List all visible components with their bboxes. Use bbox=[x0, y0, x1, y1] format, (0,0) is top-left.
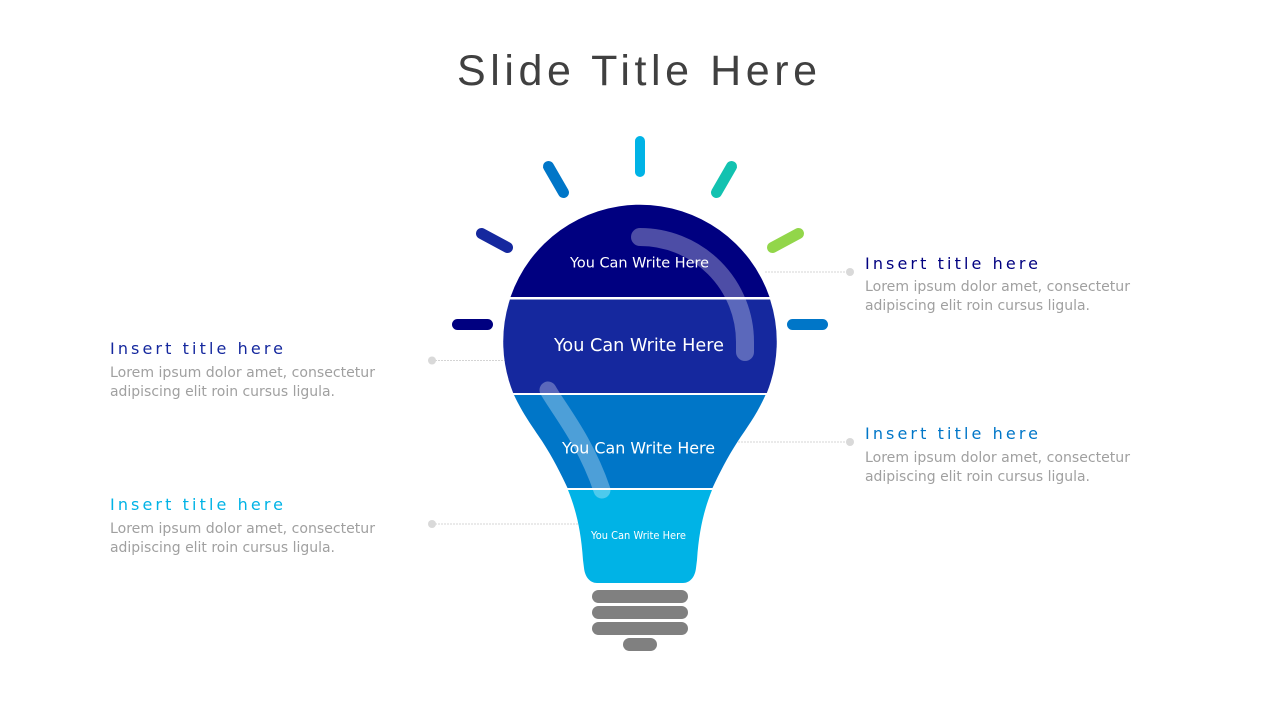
bulb segment 4 bbox=[568, 490, 712, 583]
segment label 1: You Can Write Here bbox=[569, 256, 709, 272]
bulb segment 1 bbox=[510, 205, 770, 297]
text block: lower right: adipiscing elit roin cursus ligula. bbox=[865, 469, 1090, 485]
bulb base bbox=[592, 590, 688, 651]
text block: top right: Lorem ipsum dolor amet, consectetur bbox=[865, 279, 1130, 295]
text block: middle left: adipiscing elit roin cursus ligula. bbox=[110, 384, 335, 400]
bulb segment 3 bbox=[514, 395, 766, 488]
connector lines bbox=[428, 268, 854, 528]
text block: top right: Insert title here bbox=[865, 254, 1038, 273]
bulb segment 2 bbox=[503, 300, 777, 393]
text block: bottom left: Insert title here bbox=[110, 495, 283, 514]
highlight: upper arc bbox=[640, 237, 745, 352]
text block: bottom left: Lorem ipsum dolor amet, consectetur bbox=[110, 521, 375, 537]
text block: middle left: Insert title here bbox=[110, 339, 283, 358]
text block: lower right: Lorem ipsum dolor amet, consectetur bbox=[865, 450, 1130, 466]
text block: top right: adipiscing elit roin cursus ligula. bbox=[865, 298, 1090, 314]
segment label 2: You Can Write Here bbox=[553, 336, 724, 356]
text block: lower right: Insert title here bbox=[865, 424, 1038, 443]
text block: middle left: Lorem ipsum dolor amet, consectetur bbox=[110, 365, 375, 381]
light rays bbox=[458, 141, 822, 324]
text block: top right bbox=[865, 254, 1130, 314]
text block: bottom left bbox=[110, 495, 375, 556]
text block: middle left bbox=[110, 339, 375, 400]
text block: lower right bbox=[865, 424, 1130, 485]
highlight: lower curve bbox=[548, 390, 602, 490]
segment label 3: You Can Write Here bbox=[561, 438, 715, 458]
title: Slide Title Here bbox=[457, 47, 817, 95]
text block: bottom left: adipiscing elit roin cursus ligula. bbox=[110, 540, 335, 556]
bulb bbox=[503, 205, 777, 583]
segment label 4: You Can Write Here bbox=[590, 530, 686, 542]
